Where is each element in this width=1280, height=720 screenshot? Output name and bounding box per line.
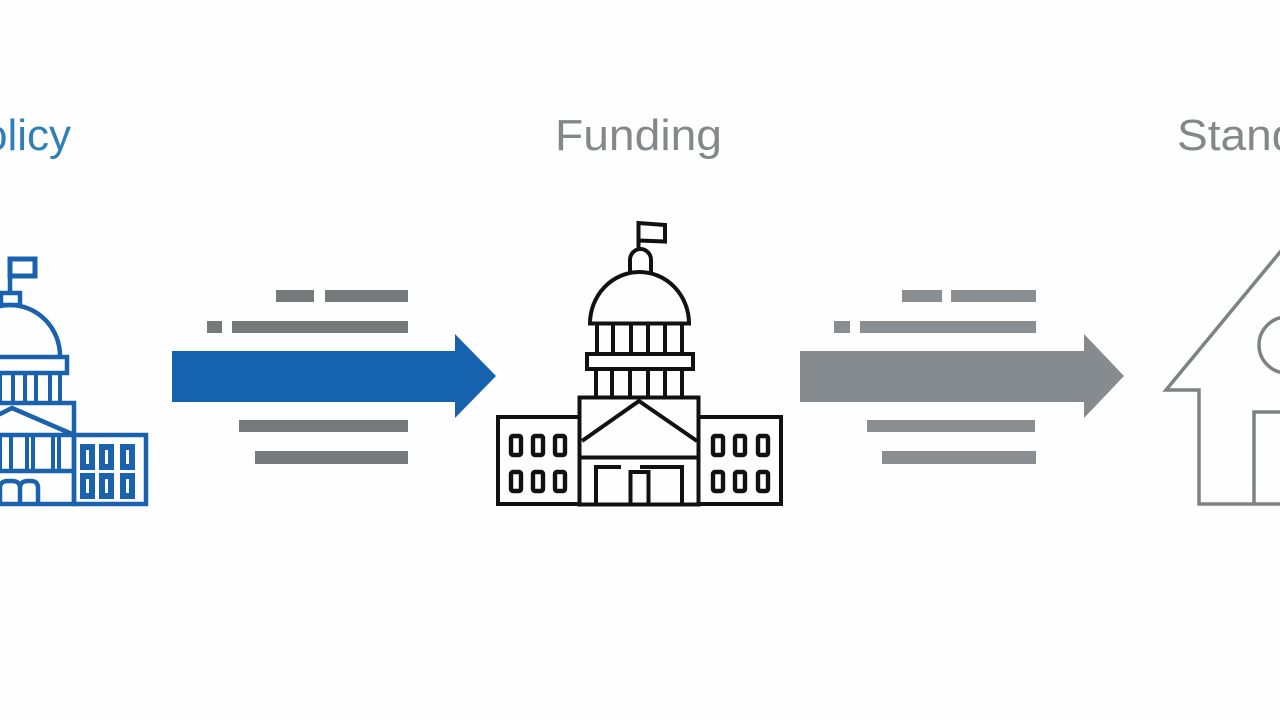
- icon: black capitol building (funding): [498, 223, 781, 504]
- text lines above blue arrow: [207, 290, 408, 333]
- text lines above grey arrow: [834, 290, 1036, 333]
- icon: blue capitol building (policy): [0, 259, 146, 504]
- icon: grey house (standards): [1166, 240, 1280, 504]
- heading: Funding: Funding: [555, 111, 722, 160]
- arrow: grey: [800, 334, 1124, 418]
- arrow: blue: [172, 334, 496, 418]
- text lines below grey arrow: [867, 420, 1036, 464]
- text lines below blue arrow: [239, 420, 408, 464]
